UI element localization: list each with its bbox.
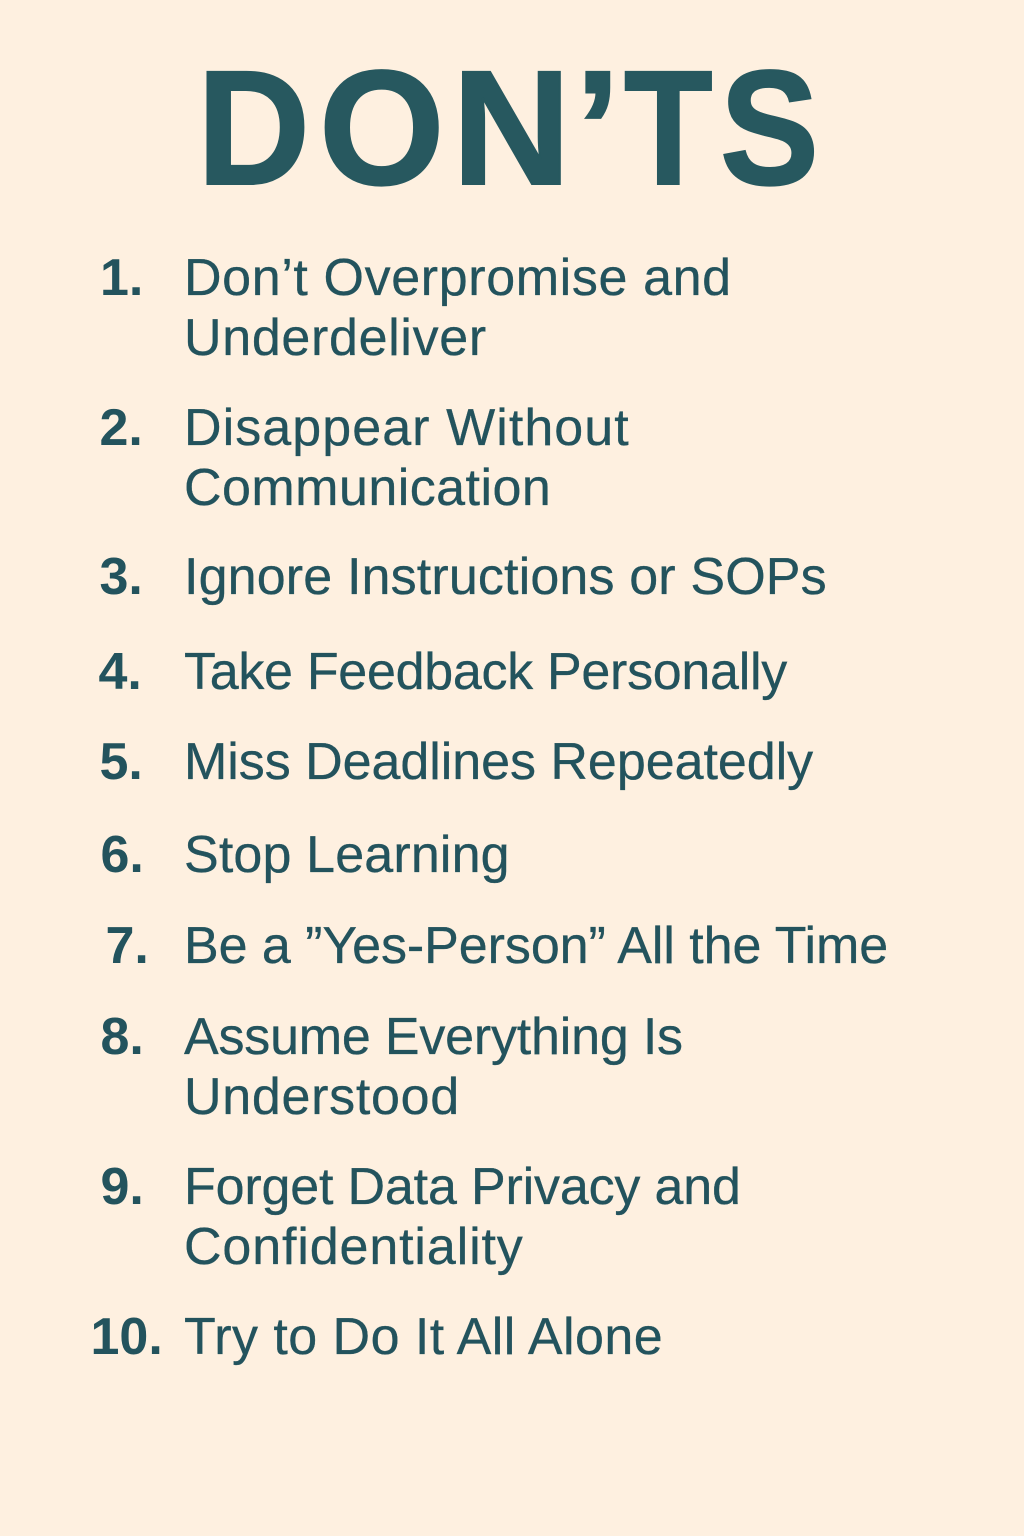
title: T xyxy=(624,36,713,219)
title: N xyxy=(452,36,571,219)
list item 10: 10. xyxy=(90,1308,163,1366)
title: O xyxy=(319,36,445,219)
list item 9: Forget Data Privacy and xyxy=(184,1158,741,1216)
list item 4: 4. xyxy=(98,643,142,701)
list item 2: 2. xyxy=(100,399,143,457)
list item 2: Disappear Without xyxy=(184,399,630,457)
list item 1: Don’t Overpromise and xyxy=(184,249,732,307)
list item 4: Take Feedback Personally xyxy=(184,643,787,701)
list item 2: Communication xyxy=(184,459,551,517)
list item 8: 8. xyxy=(100,1008,144,1066)
list item 3: Ignore Instructions or SOPs xyxy=(184,548,827,606)
list item 10: Try to Do It All Alone xyxy=(184,1308,663,1366)
list item 9 xyxy=(100,1158,741,1276)
title: ’ xyxy=(575,36,620,219)
list item 9: Confidentiality xyxy=(184,1218,524,1276)
list item 8 xyxy=(100,1008,683,1126)
list item 6: Stop Learning xyxy=(184,826,510,884)
list item 2 xyxy=(100,399,630,517)
list item 8: Assume Everything Is xyxy=(184,1008,683,1066)
list item 1: 1. xyxy=(100,249,143,307)
title xyxy=(197,36,819,219)
list item 9: 9. xyxy=(100,1158,144,1216)
list item 6: 6. xyxy=(100,826,144,884)
list item 1: Underdeliver xyxy=(184,309,487,367)
list item 5: 5. xyxy=(100,733,143,791)
list item 7: Be a ”Yes-Person” All the Time xyxy=(184,917,888,975)
title: S xyxy=(720,36,819,219)
list item 7: 7. xyxy=(106,917,149,975)
list item 8: Understood xyxy=(184,1068,460,1126)
title: D xyxy=(197,36,310,219)
list item 5: Miss Deadlines Repeatedly xyxy=(184,733,813,791)
list item 1 xyxy=(100,249,732,367)
list item 3: 3. xyxy=(100,548,143,606)
